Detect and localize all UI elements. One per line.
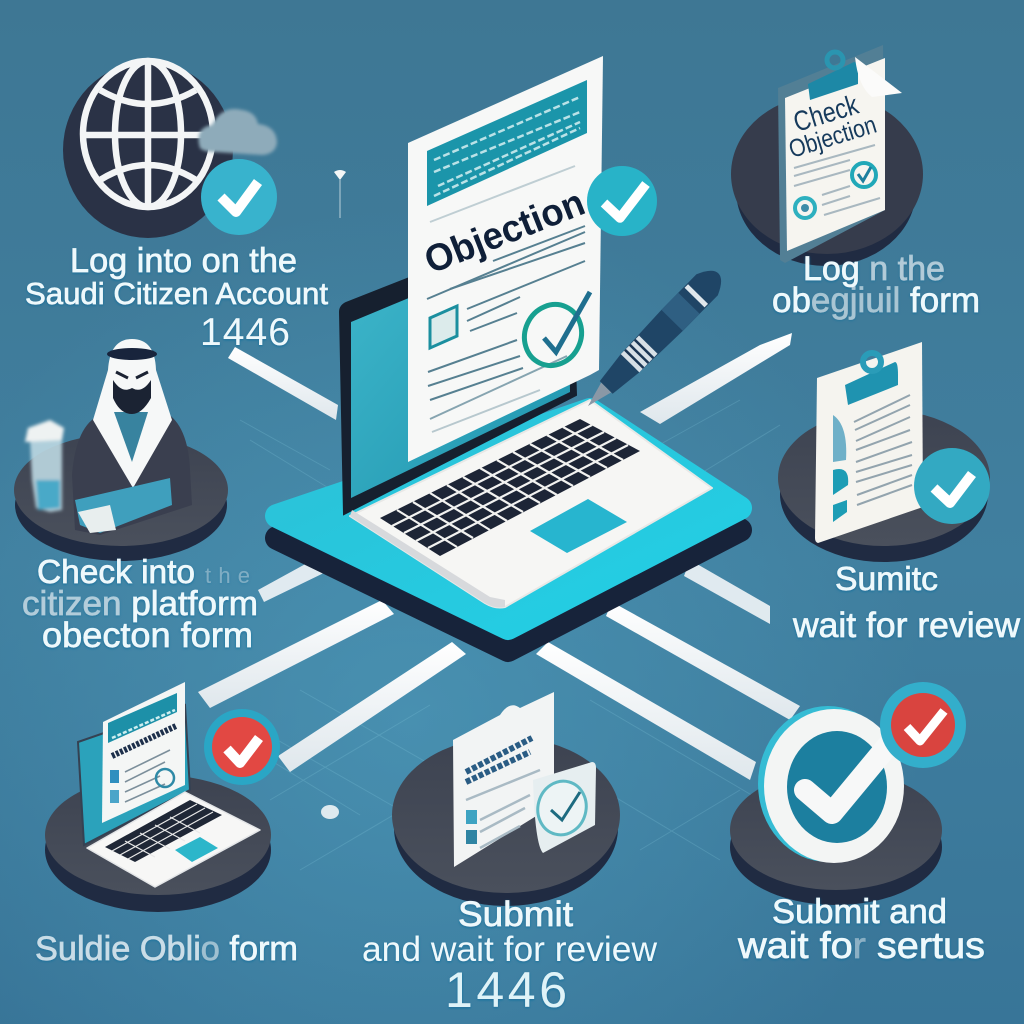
headdress	[93, 339, 172, 488]
clipboard page	[815, 342, 923, 543]
connector bars	[198, 333, 800, 780]
keyboard	[380, 419, 640, 556]
document text lines	[427, 166, 585, 432]
disc	[392, 737, 620, 906]
document ring check	[515, 292, 591, 375]
globe icon	[83, 61, 213, 207]
form icons	[833, 415, 848, 522]
step 7 label: Submit and	[772, 893, 947, 931]
clipboard clip	[808, 52, 858, 100]
step 7: status check	[730, 682, 966, 905]
step 1 label: Saudi Citizen Account	[25, 276, 328, 311]
big check ring	[758, 706, 904, 863]
small dot	[321, 805, 339, 819]
step 4: submit check	[778, 342, 990, 562]
laptop trackpad	[175, 837, 218, 862]
paper	[102, 682, 185, 823]
laptop base	[350, 400, 712, 608]
laptop base	[87, 792, 260, 887]
clipboard lines	[794, 145, 880, 215]
clipboard dot ring	[795, 198, 815, 218]
small pin mark	[334, 170, 346, 218]
clipboard clip	[845, 353, 898, 405]
step 5 label: Suldie Oblio form	[35, 930, 298, 968]
check badge	[914, 448, 990, 524]
globe disc	[63, 62, 233, 238]
step 6: submit document	[392, 692, 620, 906]
clipboard check ring	[852, 163, 876, 187]
form lines	[854, 395, 912, 505]
disc	[45, 775, 271, 912]
clipboard text	[786, 89, 880, 164]
clipboard text: Objection	[786, 111, 880, 164]
central laptop	[340, 215, 712, 608]
central platform	[277, 410, 740, 650]
document heading: Objection: Objection	[419, 182, 591, 282]
face beard	[113, 372, 151, 414]
trackpad	[530, 499, 627, 553]
headband	[107, 348, 157, 360]
check badge	[201, 159, 277, 235]
cloud icon	[198, 109, 277, 155]
document checkbox	[430, 306, 457, 348]
laptop keyboard	[105, 800, 222, 862]
step 6 label: and wait for review	[362, 930, 658, 969]
disc	[731, 94, 923, 266]
central check badge	[587, 166, 657, 236]
step 3: Saudi citizen	[14, 339, 228, 561]
step 7 label	[737, 893, 985, 966]
step 2 label: obegjiuil form	[772, 281, 980, 320]
clipboard page	[785, 58, 885, 251]
folded corner	[855, 57, 902, 97]
bottle	[25, 420, 64, 512]
laptop screen	[78, 705, 190, 845]
step 2: clipboard check	[731, 45, 923, 266]
step 1 label: Log into on the	[70, 242, 297, 280]
step 7 label: wait for sertus	[737, 925, 985, 966]
step 6 label	[362, 895, 658, 1018]
pen	[577, 263, 729, 417]
step 6 label: Submit	[458, 895, 573, 934]
man body	[72, 410, 192, 535]
step 2 label: Log n the	[803, 250, 945, 288]
document	[453, 692, 554, 867]
step 2 label	[772, 250, 980, 320]
step 3 label: Check into	[37, 553, 195, 590]
step 4 label: Sumitc	[835, 560, 938, 597]
step 4 label: wait for review	[792, 606, 1021, 645]
neck	[114, 412, 148, 462]
disc	[730, 770, 942, 905]
step 1 label: 1446	[200, 311, 290, 354]
document header	[427, 80, 587, 206]
step 3 label	[22, 553, 258, 655]
red check badge	[880, 682, 966, 768]
disc	[778, 410, 990, 562]
step 5: laptop form	[45, 682, 280, 912]
disc	[14, 434, 228, 561]
step 6 label: 1446	[445, 962, 567, 1018]
folded cloth	[75, 478, 172, 533]
step 3 label: obecton form	[42, 616, 253, 655]
step 3 label: citizen platform	[22, 585, 258, 623]
clipboard board	[778, 45, 885, 263]
step 1: globe	[63, 61, 277, 238]
check card	[532, 762, 596, 853]
laptop screen	[340, 215, 576, 514]
clipboard text: Check	[790, 89, 863, 138]
step 4 label	[792, 560, 1021, 645]
red check badge	[204, 709, 280, 785]
objection document	[408, 56, 603, 462]
step 1 label	[25, 242, 328, 354]
step 3 label: the	[205, 563, 250, 588]
